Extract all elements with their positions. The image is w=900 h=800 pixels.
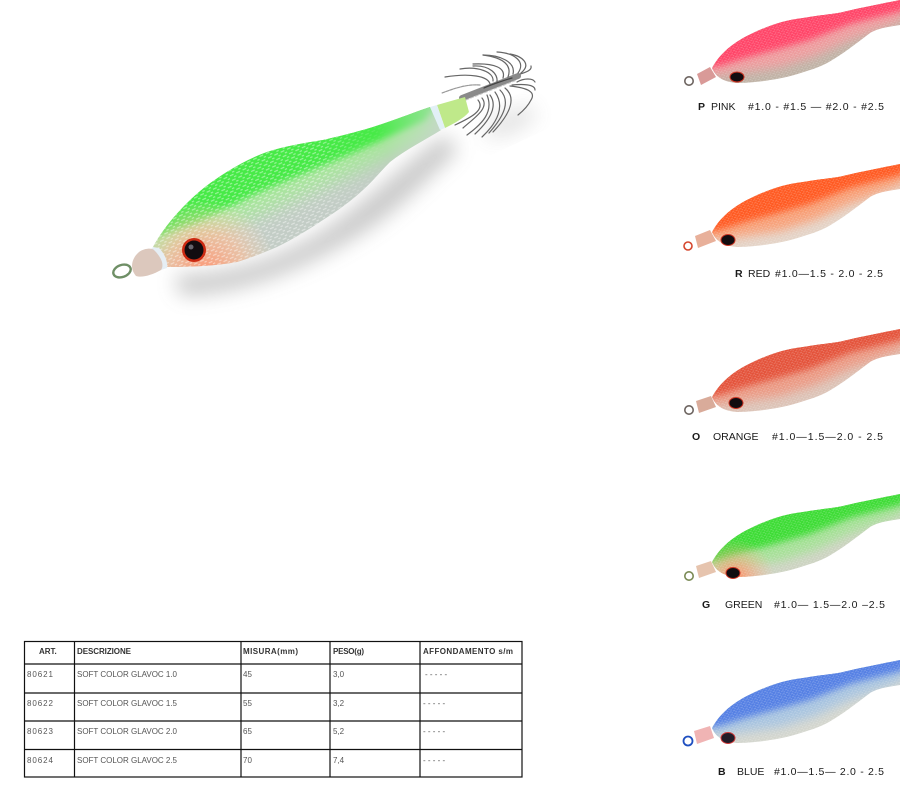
table header: DESCRIZIONE: [77, 647, 132, 656]
table row 80624: - - - - -: [423, 756, 446, 765]
table row 80622: 3,2: [333, 699, 345, 708]
label: pink: PINK: [711, 101, 736, 113]
lure thumbnail: orange: #1.0—1.5—2.0 - 2.5: [772, 431, 883, 443]
label: orange: O: [692, 431, 700, 443]
lure thumbnail: red: [684, 156, 900, 280]
lure eye: [182, 238, 206, 262]
table row 80621: - - - - -: [425, 670, 448, 679]
table row 80623: 80623: [27, 727, 54, 736]
lure body: [153, 107, 441, 267]
lure thumbnail: blue: #1.0—1.5— 2.0 - 2.5: [774, 766, 884, 778]
lure thumbnail: pink: [685, 0, 900, 113]
table header: PESO(g): [333, 647, 364, 656]
table row 80623: [27, 727, 446, 736]
lure thumbnail: green: #1.0— 1.5—2.0 –2.5: [774, 599, 885, 611]
lure nose collar: [150, 247, 167, 270]
table header: ART.: [39, 647, 57, 656]
table row 80621: SOFT COLOR GLAVOC 1.0: [77, 670, 178, 679]
table row 80624: 70: [243, 756, 252, 765]
table row 80621: [27, 670, 448, 679]
table row 80624: SOFT COLOR GLAVOC 2.5: [77, 756, 178, 765]
table row 80622: 80622: [27, 699, 54, 708]
label: green: G: [702, 599, 710, 611]
lure thumbnail: orange: [685, 321, 900, 443]
table header: [39, 647, 513, 656]
table row 80624: [27, 756, 446, 765]
icon: squid jig hooks: [442, 52, 535, 137]
table header: MISURA(mm): [243, 647, 298, 656]
table row 80621: 80621: [27, 670, 54, 679]
table row 80622: SOFT COLOR GLAVOC 1.5: [77, 699, 178, 708]
lure tail collar: [437, 97, 469, 128]
icon: line eye ring: [111, 262, 133, 280]
label: pink: P: [698, 101, 705, 113]
label: orange: ORANGE: [713, 431, 759, 443]
label: red: RED: [748, 268, 771, 280]
table row 80623: - - - - -: [423, 727, 446, 736]
table row 80623: SOFT COLOR GLAVOC 2.0: [77, 727, 178, 736]
table row 80623: 5,2: [333, 727, 345, 736]
label: red: R: [735, 268, 743, 280]
lure thumbnail: pink: #1.0 - #1.5 — #2.0 - #2.5: [748, 101, 884, 113]
lure thumbnail: green: [685, 486, 900, 611]
main lure product photo: [111, 52, 540, 295]
lure drop shadow: [175, 101, 540, 295]
table row 80624: 80624: [27, 756, 54, 765]
lure thumbnail: red: #1.0—1.5 - 2.0 - 2.5: [775, 268, 883, 280]
table row 80623: 65: [243, 727, 252, 736]
table row 80621: 3,0: [333, 670, 345, 679]
table row 80622: 55: [243, 699, 252, 708]
lure thumbnail: blue: [684, 652, 900, 778]
specification table: [24, 641, 522, 777]
label: blue: BLUE: [737, 766, 764, 778]
table row 80621: 45: [243, 670, 252, 679]
table row 80622: - - - - -: [423, 699, 446, 708]
table row 80624: 7,4: [333, 756, 345, 765]
label: green: GREEN: [725, 599, 762, 611]
label: blue: B: [718, 766, 726, 778]
table row 80622: [27, 699, 446, 708]
table header: AFFONDAMENTO s/m: [423, 647, 513, 656]
